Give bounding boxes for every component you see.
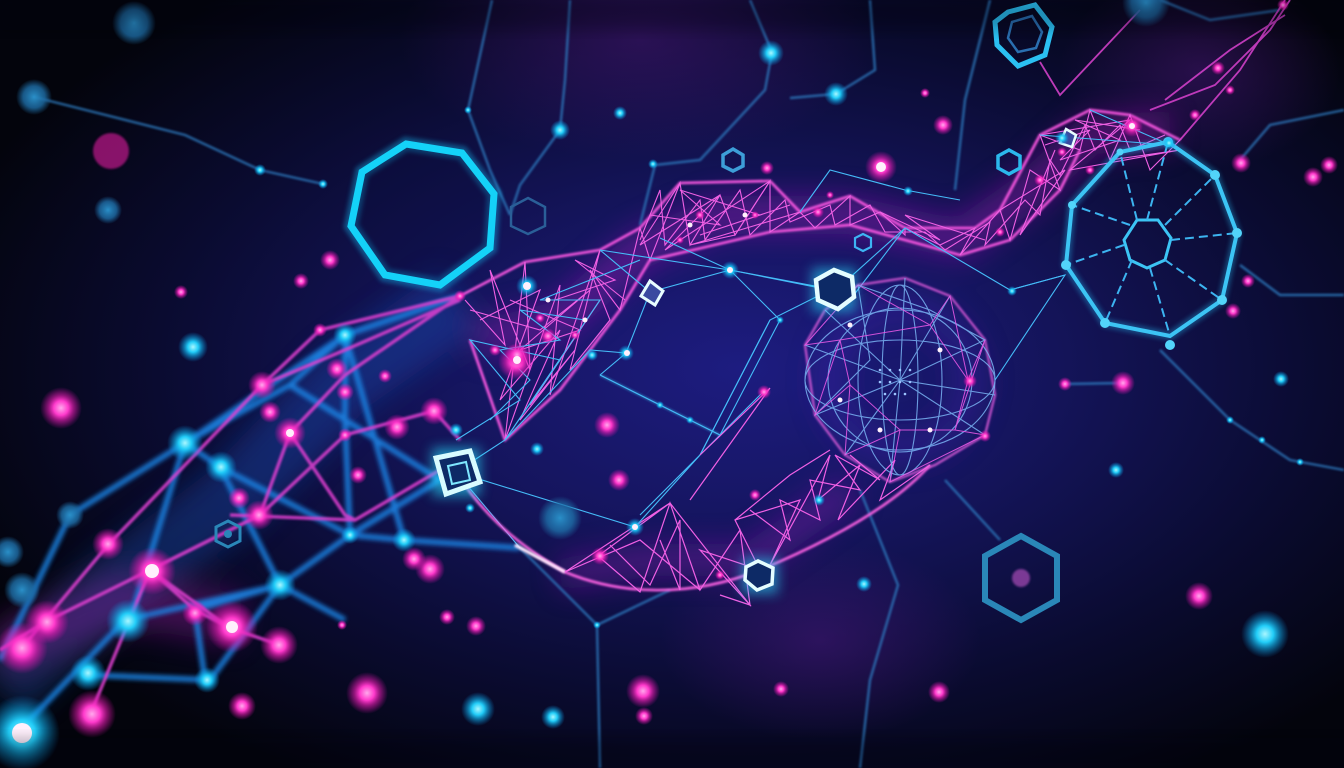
top right magenta strands (1040, 0, 1290, 140)
crystal node top right (1060, 129, 1076, 147)
sphere core dots (879, 369, 911, 395)
steel blue hexagon at lower right (985, 536, 1057, 620)
wheel nodes (1061, 137, 1242, 350)
crystal node left (432, 448, 480, 496)
wheel spokes (1066, 142, 1237, 336)
sphere magenta facets (805, 285, 985, 482)
magenta network lines (0, 296, 460, 715)
soft ribbon glow underlay (0, 130, 1170, 690)
small hexagon icons (216, 149, 1020, 547)
ribbon outer strands (460, 110, 1180, 440)
bright square crystal nodes (432, 129, 1076, 594)
thick blurred network lines (0, 296, 520, 730)
lower white highlight (515, 545, 565, 572)
upper molecular ribbon mesh (456, 110, 1180, 548)
dark magenta blurred spot (93, 133, 129, 169)
ribbon cyan mesh (456, 110, 1170, 548)
small white sparkle nodes (12, 123, 1135, 743)
lower ribbon curve and mesh (456, 388, 930, 605)
lower triangle mesh (565, 388, 930, 605)
large cyan octagon (351, 144, 494, 285)
top-right hexagon icon (995, 5, 1052, 66)
crystal node bottom (742, 558, 778, 594)
crystal node centre (812, 268, 856, 312)
lower bright curve (456, 465, 930, 590)
lower-left network (0, 296, 520, 730)
dim blurred teal nodes (0, 0, 1170, 608)
wheel polygon at upper right (1061, 137, 1242, 350)
sphere latitude and longitude lines (805, 278, 995, 482)
ribbon mesh triangles (465, 110, 1180, 440)
crystal node upper (641, 281, 663, 305)
wireframe sphere (805, 278, 995, 482)
